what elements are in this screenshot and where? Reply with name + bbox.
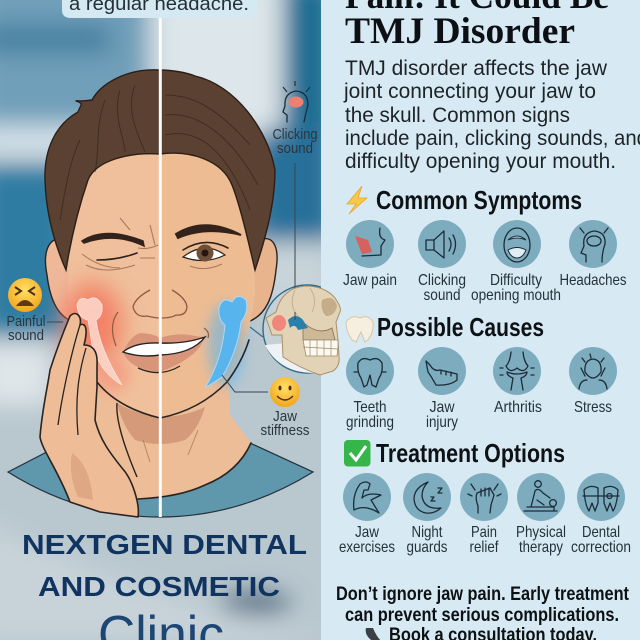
item: arthritis: [493, 347, 542, 416]
item: jaw injury: Jaw: [430, 399, 455, 416]
item: physical therapy: [516, 473, 566, 556]
item: physical therapy: Physical: [516, 524, 566, 541]
clinic name heading: [22, 529, 307, 640]
callout: clicking sound with brain icon: sound: [277, 140, 313, 157]
cheekbone: [303, 322, 335, 340]
icon: smiling face emoji with label: Jaw: [273, 408, 297, 425]
item: arthritis: Arthritis: [494, 399, 542, 416]
item: clicking sound: sound: [424, 287, 460, 304]
item: jaw pain: Jaw pain: [343, 272, 397, 289]
item: night guards: guards: [406, 539, 448, 556]
item: pain relief: relief: [470, 539, 499, 556]
blue cool jaw bone: [205, 296, 247, 388]
centre divider: [159, 18, 162, 517]
closing call to action: [336, 584, 630, 640]
red inflamed jaw joint: [77, 298, 122, 385]
item: teeth grinding: Teeth: [354, 399, 386, 416]
section: possible causes: [346, 312, 617, 431]
icon: pained face emoji with label: [6, 278, 63, 344]
eye socket: [322, 298, 337, 316]
item: headaches: Headaches: [560, 272, 626, 289]
icon: lightning: [347, 186, 367, 214]
intro paragraph: difficulty opening your mouth.: [345, 149, 616, 173]
item: difficulty opening mouth: Difficulty: [490, 272, 542, 289]
item: dental correction: Dental: [582, 524, 620, 541]
item: physical therapy: therapy: [519, 539, 563, 556]
section: treatment options: [339, 438, 631, 556]
item: pain relief: [460, 473, 508, 556]
neck shadow: [117, 403, 205, 444]
item: teeth grinding: grinding: [346, 414, 394, 431]
intro paragraph: [343, 56, 640, 173]
item: stress: Stress: [574, 399, 612, 416]
item: clicking sound: [418, 220, 466, 304]
item: jaw pain: [343, 220, 397, 289]
red joint: [272, 315, 286, 331]
item: night guards: Night: [412, 524, 443, 541]
item: difficulty opening mouth: opening mouth: [471, 287, 561, 304]
icon: green check box: [344, 440, 370, 466]
item: clicking sound: Clicking: [418, 272, 466, 289]
shirt and bust: [8, 440, 313, 517]
item: jaw exercises: exercises: [339, 539, 395, 556]
item: pain relief: Pain: [471, 524, 497, 541]
icon: smiling face emoji with label: stiffness: [260, 422, 310, 439]
clinic name heading: AND COSMETIC: [38, 571, 280, 602]
heading: Common Symptoms: [376, 185, 582, 215]
neck: [95, 370, 251, 499]
item: headaches: [560, 220, 626, 289]
icon: smiling face emoji with label: [222, 375, 310, 439]
intro paragraph: TMJ disorder affects the jaw: [345, 56, 607, 80]
callout: clicking sound with brain icon: [272, 81, 318, 315]
heading: Possible Causes: [377, 312, 544, 342]
intro paragraph: the skull. Common signs: [345, 103, 570, 127]
right eyebrow and open eye: [176, 225, 241, 269]
face skin: [68, 150, 255, 418]
title: [345, 0, 609, 52]
item: stress: [569, 347, 617, 416]
icon: telephone: [366, 628, 382, 640]
icon: head with brain: [283, 81, 310, 122]
panel: right information panel background: [321, 0, 640, 640]
title: TMJ Disorder: [345, 11, 575, 52]
item: dental correction: correction: [571, 539, 631, 556]
intro paragraph: joint connecting your jaw to: [343, 79, 596, 103]
illustration: man's face split in two: [8, 18, 313, 517]
icon: tooth: [346, 317, 373, 342]
item: teeth grinding: [346, 347, 394, 431]
blue cool glow: [208, 303, 244, 387]
skull lens backdrop: [262, 284, 321, 374]
item: dental correction: [571, 473, 631, 556]
skull bone: [266, 286, 340, 375]
left eyebrow and closed eye: [82, 218, 158, 270]
callout: clicking sound with brain icon: Clicking: [272, 126, 318, 143]
item: jaw injury: injury: [426, 414, 458, 431]
item: jaw exercises: [339, 473, 395, 556]
nose: [133, 290, 187, 318]
heading: Treatment Options: [376, 438, 565, 468]
icon: pained face emoji with label: Painful: [6, 313, 46, 330]
left ear: [46, 239, 75, 322]
hair: [45, 70, 275, 270]
mouth: [112, 312, 208, 373]
item: jaw injury: [418, 347, 466, 431]
hair strands: [60, 85, 258, 220]
blue joint: [288, 316, 308, 330]
item: difficulty opening mouth: [471, 220, 561, 304]
chin line: [97, 340, 249, 418]
item: jaw exercises: Jaw: [355, 524, 379, 541]
section: common symptoms: [343, 185, 626, 304]
blurred clinic background: [0, 0, 335, 640]
teeth: [303, 340, 338, 356]
red pain glow: [62, 283, 122, 367]
icon: pained face emoji with label: sound: [8, 327, 44, 344]
clinic name heading: NEXTGEN DENTAL: [22, 529, 307, 560]
hand on the cheek: [40, 314, 138, 517]
illustration: skull: [250, 286, 340, 375]
right ear: [248, 239, 277, 322]
item: night guards: [403, 473, 451, 556]
